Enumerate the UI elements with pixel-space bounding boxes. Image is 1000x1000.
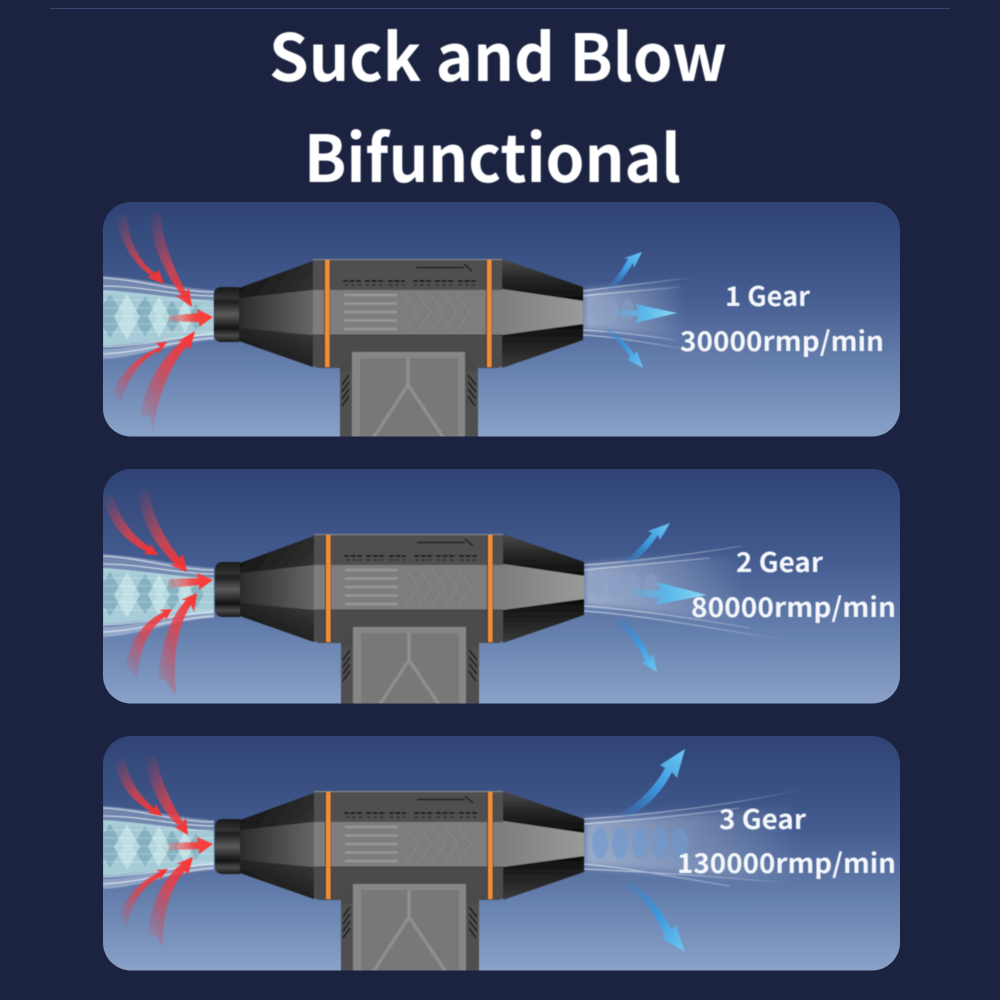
gear label <box>680 284 883 358</box>
gear label: 80000rmp/min <box>691 586 896 625</box>
red intake arrows <box>113 213 213 430</box>
gear label: 1 Gear <box>725 275 810 314</box>
blue exhaust arrows <box>615 523 707 672</box>
red intake arrows <box>115 756 213 948</box>
title <box>269 6 727 201</box>
gear label: 2 Gear <box>736 541 823 580</box>
red intake arrows <box>103 490 213 695</box>
gear label <box>678 808 895 880</box>
blue exhaust arrows <box>603 252 677 368</box>
blower device <box>214 259 583 448</box>
air intake stream <box>96 276 214 359</box>
title: Suck and Blow <box>269 6 727 100</box>
gear label <box>692 550 895 624</box>
gear label: 130000rmp/min <box>677 842 896 881</box>
air intake stream <box>96 554 214 637</box>
panel: 1 gear <box>96 202 900 448</box>
gear label: 30000rmp/min <box>680 320 884 359</box>
blower device <box>215 534 584 723</box>
panel: 2 gear <box>96 469 900 723</box>
air intake stream <box>96 806 214 889</box>
air exhaust stream <box>583 277 695 348</box>
title: Bifunctional <box>304 107 681 201</box>
air exhaust stream <box>584 790 800 886</box>
blue exhaust arrows <box>617 749 685 952</box>
air exhaust stream <box>584 545 766 637</box>
panel: 3 gear <box>96 736 900 980</box>
blower device <box>215 791 584 980</box>
gear label: 3 Gear <box>719 798 806 837</box>
